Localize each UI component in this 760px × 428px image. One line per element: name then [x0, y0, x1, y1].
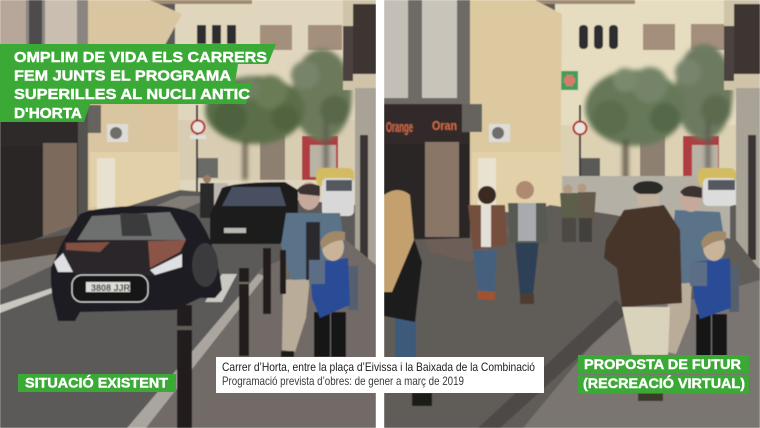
air conditioner [107, 124, 128, 142]
title banner: OMPLIM DE VIDA ELS CARRERS [14, 49, 267, 66]
road and pavements [0, 190, 376, 428]
road sign [190, 105, 206, 195]
white parked car [316, 168, 354, 216]
right building [343, 0, 376, 268]
man with denim jacket [281, 182, 345, 357]
road sign [574, 105, 586, 190]
label: future proposal: PROPOSTA DE FUTUR [584, 357, 741, 372]
elderly pair [560, 184, 596, 242]
background building [535, 0, 740, 205]
caption box: Programació prevista d’obres: de gener a març de 2019 [222, 374, 464, 388]
right building [724, 0, 760, 268]
pedestrians in background [200, 175, 228, 218]
air conditioner [489, 124, 510, 142]
cream wall [468, 0, 562, 205]
dark car [210, 182, 298, 244]
background building [152, 0, 360, 205]
icon: pharmacy cross [561, 71, 578, 90]
label: future proposal: (RECREACIÓ VIRTUAL) [583, 376, 745, 391]
bollards [177, 248, 286, 428]
grey Peugeot car: 3808 JJR [91, 283, 131, 293]
man with denim jacket [667, 184, 726, 354]
label: future proposal [578, 355, 749, 394]
yellow container and white car [698, 168, 736, 206]
caption box: Carrer d’Horta, entre la plaça d’Eivissa i la Baixada de la Combinació [222, 360, 535, 374]
left shop facade [0, 0, 101, 250]
label: existing situation: SITUACIÓ EXISTENT [25, 376, 169, 390]
plaza ground [555, 176, 730, 240]
elderly man with beret [604, 181, 682, 401]
couple walking: man [508, 181, 548, 304]
blonde woman [384, 190, 432, 406]
couple walking: woman [468, 186, 507, 300]
title banner: D'HORTA [14, 105, 82, 122]
paved street ground [384, 205, 760, 428]
title banner: FEM JUNTS EL PROGRAMA [14, 68, 231, 84]
caption box [216, 357, 544, 393]
trees [582, 42, 736, 176]
panel: existing situation photo [0, 0, 376, 428]
left shop facade [384, 0, 482, 240]
grey Peugeot car [51, 206, 222, 321]
panel: future proposal photo [384, 0, 760, 428]
left shop facade: Oran [432, 118, 457, 133]
title banner: SUPERILLES AL NUCLI ANTIC [14, 86, 250, 103]
title banner [0, 44, 276, 122]
trees [205, 49, 352, 180]
left shop facade: Orange [386, 119, 413, 136]
child with blue vest [309, 231, 358, 357]
child with blue vest [690, 231, 739, 358]
cream wall [85, 0, 182, 210]
